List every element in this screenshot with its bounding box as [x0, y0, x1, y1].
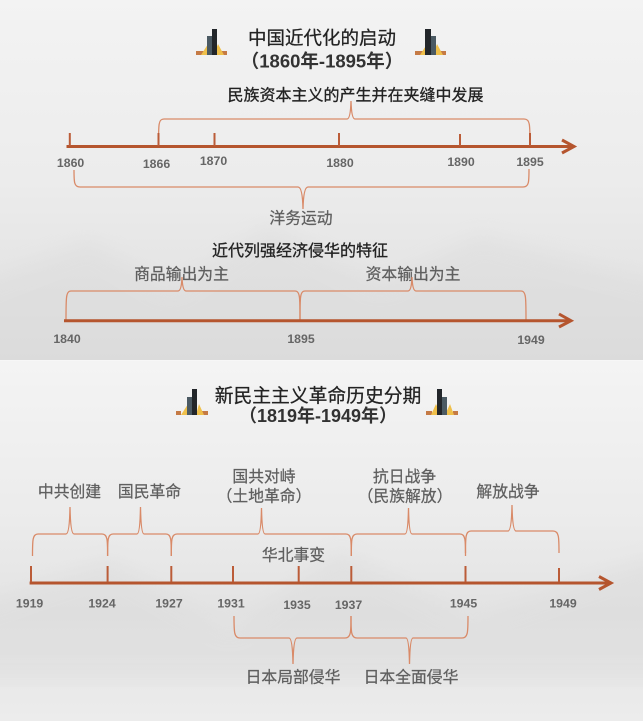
title: period 1819-1949: （1819年-1949年）	[239, 405, 397, 426]
label: self-strengthening: 洋务运动	[269, 210, 333, 228]
panel: modernization timeline	[53, 28, 574, 347]
year labels 1860-1895: 1895	[516, 155, 544, 169]
icon: city bars right	[426, 389, 458, 415]
year labels 1919-1949: 1931	[217, 596, 245, 610]
year labels 1840-1949	[53, 332, 545, 347]
title: new democratic revolution: 新民主主义革命历史分期	[215, 385, 421, 406]
labels above axis: （土地革命）	[217, 488, 311, 506]
icon: city bars left	[196, 29, 227, 55]
label: national capitalism: 民族资本主义的产生并在夹缝中发展	[227, 86, 484, 104]
year labels 1860-1895	[57, 154, 544, 171]
label: japan partial invasion: 日本局部侵华	[246, 668, 340, 686]
brace: capital export	[300, 277, 526, 320]
year labels 1860-1895: 1860	[57, 156, 84, 170]
year labels 1840-1949: 1895	[287, 332, 315, 346]
icon: city bars right	[415, 29, 446, 55]
year labels 1860-1895: 1870	[200, 154, 227, 168]
label: economic aggression heading: 近代列强经济侵华的特征	[212, 242, 388, 260]
year labels 1919-1949: 1935	[283, 598, 311, 612]
labels above axis	[38, 468, 540, 564]
timeline axis 1860-1895	[66, 133, 574, 153]
braces below axis	[234, 616, 468, 664]
label: commodity export: 商品输出为主	[134, 266, 229, 284]
brace: self-strengthening	[74, 169, 529, 209]
year labels 1860-1895: 1866	[143, 157, 170, 171]
labels above axis: 中共创建	[38, 483, 101, 501]
year labels 1919-1949: 1945	[450, 596, 477, 610]
labels above axis: 国共对峙	[232, 468, 296, 486]
year labels 1919-1949	[16, 596, 577, 612]
labels above axis: （民族解放）	[358, 488, 452, 506]
year labels 1860-1895: 1880	[326, 156, 354, 170]
labels above axis: 抗日战争	[373, 468, 436, 486]
year labels 1919-1949: 1937	[335, 598, 362, 612]
year labels 1919-1949: 1949	[549, 596, 577, 610]
year labels 1919-1949: 1919	[16, 596, 43, 610]
brace: national capitalism	[158, 101, 530, 145]
year labels 1919-1949: 1924	[88, 596, 116, 610]
year labels 1840-1949: 1840	[53, 332, 81, 346]
label: japan full invasion: 日本全面侵华	[364, 668, 458, 686]
title: modernization: 中国近代化的启动	[248, 28, 396, 48]
title: period 1860-1895: （1860年-1895年）	[241, 50, 403, 72]
timeline axis 1919-1949	[30, 566, 611, 590]
brace: commodity export	[66, 277, 300, 320]
labels above axis: 解放战争	[476, 483, 540, 501]
year labels 1840-1949: 1949	[517, 333, 545, 347]
braces above axis	[32, 505, 559, 556]
labels above axis: 国民革命	[118, 483, 181, 501]
label: capital export: 资本输出为主	[366, 266, 460, 284]
year labels 1919-1949: 1927	[155, 596, 183, 610]
icon: city bars left	[176, 389, 208, 415]
year labels 1860-1895: 1890	[447, 155, 475, 169]
timeline axis 1840-1949	[64, 314, 571, 327]
panel: new democratic revolution timeline	[16, 385, 611, 686]
labels above axis: 华北事变	[262, 546, 325, 564]
